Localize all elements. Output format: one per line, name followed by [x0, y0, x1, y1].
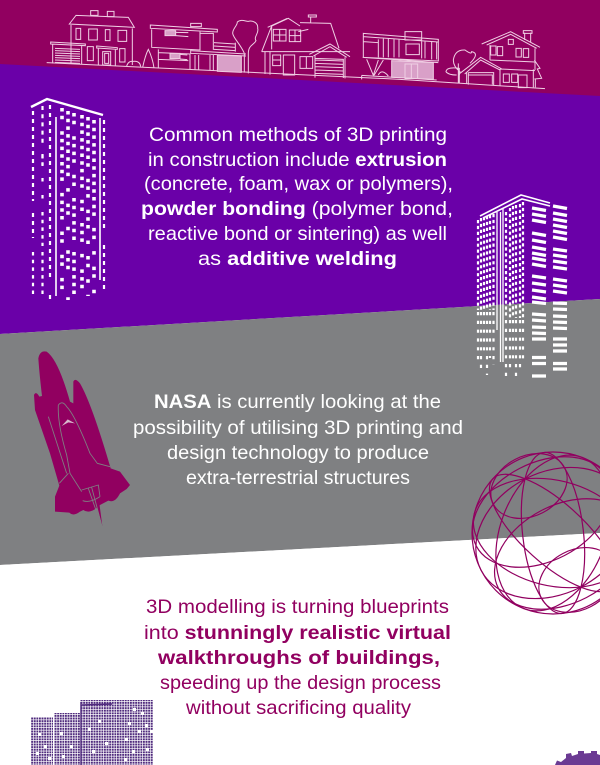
- tower right face windows: [62, 108, 94, 300]
- text block: NASA: [133, 391, 463, 489]
- white band: [0, 533, 600, 765]
- city dark roof line: [81, 702, 112, 765]
- illustration: dotted city: [31, 700, 153, 765]
- magenta top band: [0, 0, 600, 110]
- purple band: [0, 64, 600, 334]
- text block: 3D printing methods: as additive welding: [198, 248, 397, 270]
- text block: 3D printing methods: reactive bond or sintering) as well: [148, 223, 447, 245]
- text block: 3D modelling: speeding up the design process: [160, 672, 441, 694]
- text block: NASA: NASA is currently looking at the: [154, 391, 441, 413]
- text block: NASA: extra-terrestrial structures: [186, 467, 410, 489]
- shuttle outlines: [48, 403, 110, 525]
- city light windows: [36, 708, 153, 761]
- illustration: tower right: [478, 195, 567, 376]
- text block: 3D modelling: 3D modelling is turning blueprints: [146, 596, 449, 618]
- illustration: wireframe globe: [453, 434, 600, 632]
- tower long lines: [56, 117, 100, 296]
- text block: 3D modelling: without sacrificing quality: [185, 697, 411, 719]
- text block: 3D printing methods: Common methods of 3D printing: [149, 124, 447, 146]
- tower vertical lines: [497, 208, 503, 362]
- text block: 3D modelling: walkthroughs of buildings,: [157, 647, 440, 669]
- text block: 3D printing methods: powder bonding (polymer bond,: [141, 198, 453, 220]
- tower roof: [480, 195, 550, 218]
- tower upper windows: [478, 202, 523, 318]
- shuttle cockpit mark: [62, 419, 75, 426]
- tower lower windows: [478, 312, 523, 376]
- text block: NASA: possibility of utilising 3D printing and: [133, 417, 463, 439]
- text block: 3D printing methods: (concrete, foam, wax or polymers),: [144, 173, 453, 195]
- tower right bars: [532, 206, 567, 376]
- text block: 3D modelling: [144, 596, 451, 719]
- illustration: space shuttle: [34, 351, 130, 526]
- tower left face windows: [33, 105, 104, 303]
- tower roof: [31, 99, 103, 115]
- illustration: dotted tower left: [31, 99, 104, 303]
- text block: 3D modelling: into stunningly realistic virtual: [144, 622, 451, 644]
- text block: 3D printing methods: [141, 124, 453, 270]
- text block: 3D printing methods: in construction include extrusion: [148, 149, 447, 171]
- shuttle silhouette: [34, 351, 130, 514]
- illustration: gear: [555, 751, 600, 765]
- text block: NASA: design technology to produce: [167, 442, 429, 464]
- illustration: row of houses: [47, 11, 545, 89]
- grey band: [0, 299, 600, 565]
- shuttle tail spike: [96, 503, 102, 526]
